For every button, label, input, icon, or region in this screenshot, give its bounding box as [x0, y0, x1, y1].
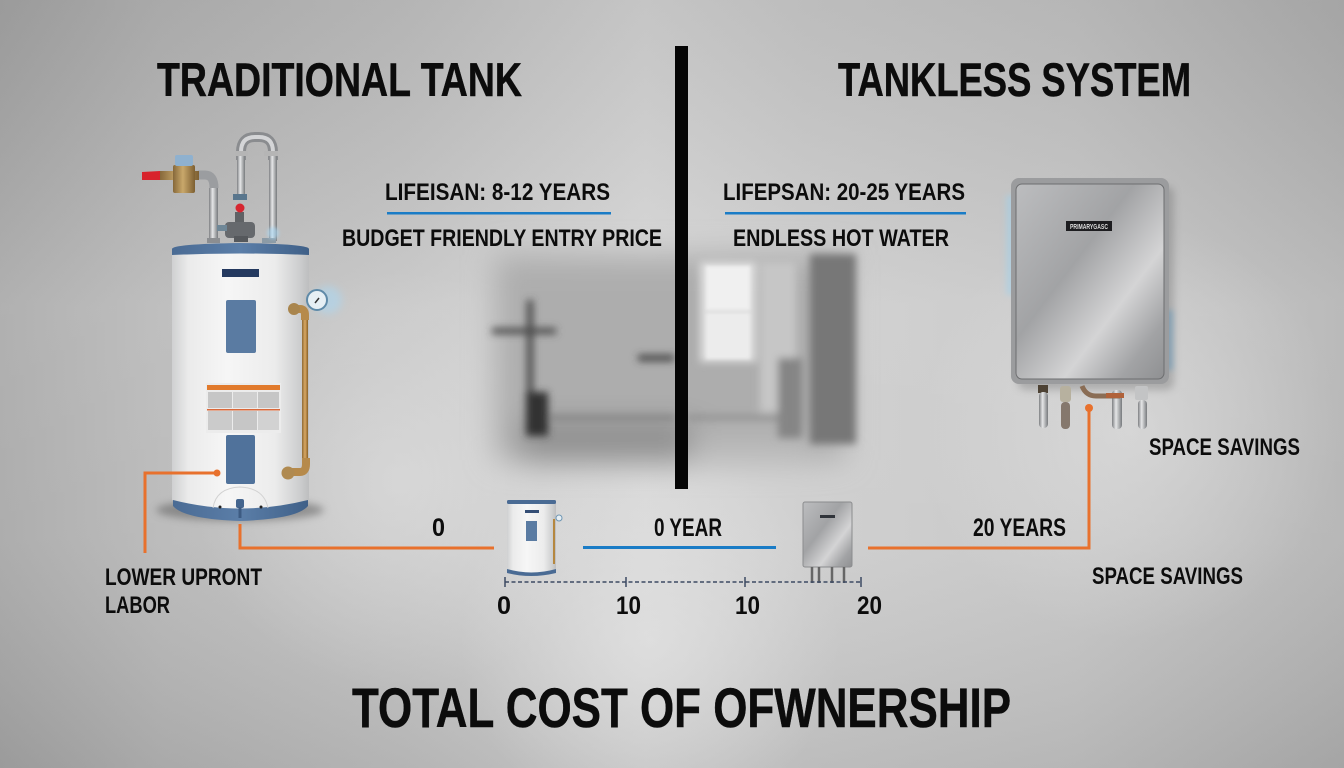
heading: traditional tank: TRADITIONAL TANK: [157, 53, 522, 106]
label: lower upfront labor: [105, 564, 262, 619]
callout: lifespan tank: [342, 179, 662, 252]
cabinet shadow: [1018, 186, 1174, 390]
warning label: [206, 383, 281, 433]
footer title: TOTAL COST OF OFWNERSHIP: [352, 676, 1011, 739]
illustration: tankless unit: [1006, 178, 1174, 429]
dashed axis: [505, 581, 861, 583]
callout: lifespan tank: BUDGET FRIENDLY ENTRY PRICE: [342, 225, 662, 252]
callout: lifespan tankless: LIFEPSAN: 20-25 YEARS: [723, 179, 965, 206]
pipe fittings: [1038, 385, 1148, 429]
orange leader: tankless to timeline: [868, 404, 1093, 548]
axis labels: 10: [735, 592, 760, 620]
blue bar: [583, 546, 776, 549]
callout: lifespan tankless: [723, 179, 966, 252]
mini tankless icon: [803, 502, 852, 583]
label: lower upfront labor: LOWER UPRONT: [105, 564, 262, 591]
axis labels: 10: [616, 592, 641, 620]
timeline: [432, 500, 1066, 620]
axis labels: 20: [857, 592, 882, 620]
cabinet: [1011, 178, 1169, 384]
pipe glow: [267, 227, 279, 239]
mini tank icon: [507, 500, 562, 576]
heading: tankless system: TANKLESS SYSTEM: [838, 53, 1191, 106]
pipe loop: [198, 137, 278, 243]
brand plate: [1066, 221, 1112, 231]
top cap: [172, 243, 309, 255]
label: start: 0: [432, 514, 445, 542]
orange leader: tank to label: [145, 470, 220, 553]
label: zero year: 0 YEAR: [654, 514, 722, 542]
cabinet glow: [1006, 195, 1018, 295]
label: space savings lower: SPACE SAVINGS: [1092, 563, 1243, 590]
copper pipe: [282, 303, 308, 480]
orange leader: tank to timeline: [240, 524, 494, 548]
callout: lifespan tankless: ENDLESS HOT WATER: [733, 225, 949, 252]
gauge glow and gauge: [314, 286, 342, 314]
drain valve: [213, 487, 268, 518]
label: lower upfront labor: LABOR: [105, 592, 170, 619]
tank body: [172, 250, 309, 512]
callout: lifespan tank: LIFEISAN: 8-12 YEARS: [385, 179, 610, 206]
brand plate: [222, 269, 259, 277]
lower panel: [226, 435, 255, 484]
upper panel: [226, 300, 256, 353]
bottom band: [173, 500, 308, 521]
label: space savings upper: SPACE SAVINGS: [1149, 434, 1300, 461]
axis labels: [497, 592, 882, 620]
mixing valve: [142, 155, 199, 193]
model text: PRIMARYGASC: [1070, 224, 1108, 231]
illustration: traditional water heater: [142, 137, 342, 521]
grey control valve: [217, 194, 255, 242]
axis labels: 0: [497, 592, 511, 620]
floor shadow: [156, 499, 324, 521]
blurred room backdrop: [492, 254, 856, 462]
center divider: [675, 46, 688, 489]
label: twenty years: 20 YEARS: [973, 514, 1066, 542]
